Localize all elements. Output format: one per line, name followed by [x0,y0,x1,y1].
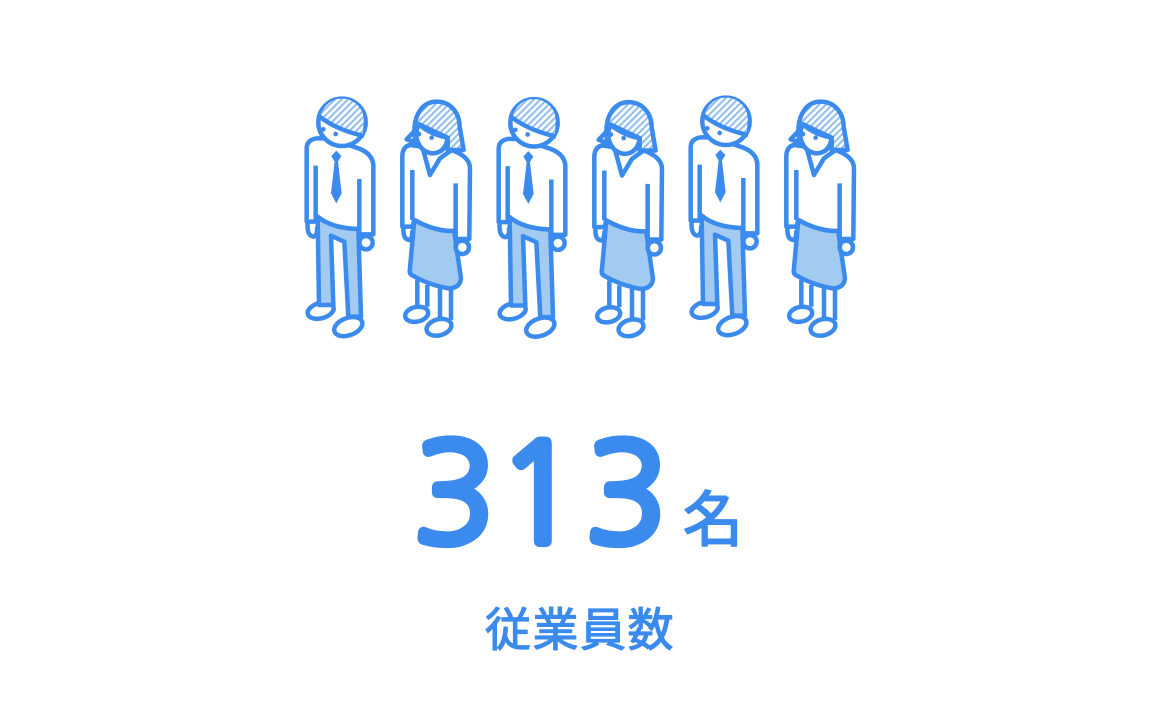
figure: woman 2 [594,102,662,339]
unit: 名: 名 [683,487,743,554]
big number: 313: 313 [413,426,668,562]
figure: man 2 [498,99,565,340]
illustration: row of six employees [306,98,854,340]
figure: woman 1 [402,102,470,338]
figure: woman 3 [786,102,854,338]
caption: 従業員数: 従業員数 [485,604,675,656]
figure: man 1 [306,99,373,340]
figure: man 3 [690,98,757,339]
